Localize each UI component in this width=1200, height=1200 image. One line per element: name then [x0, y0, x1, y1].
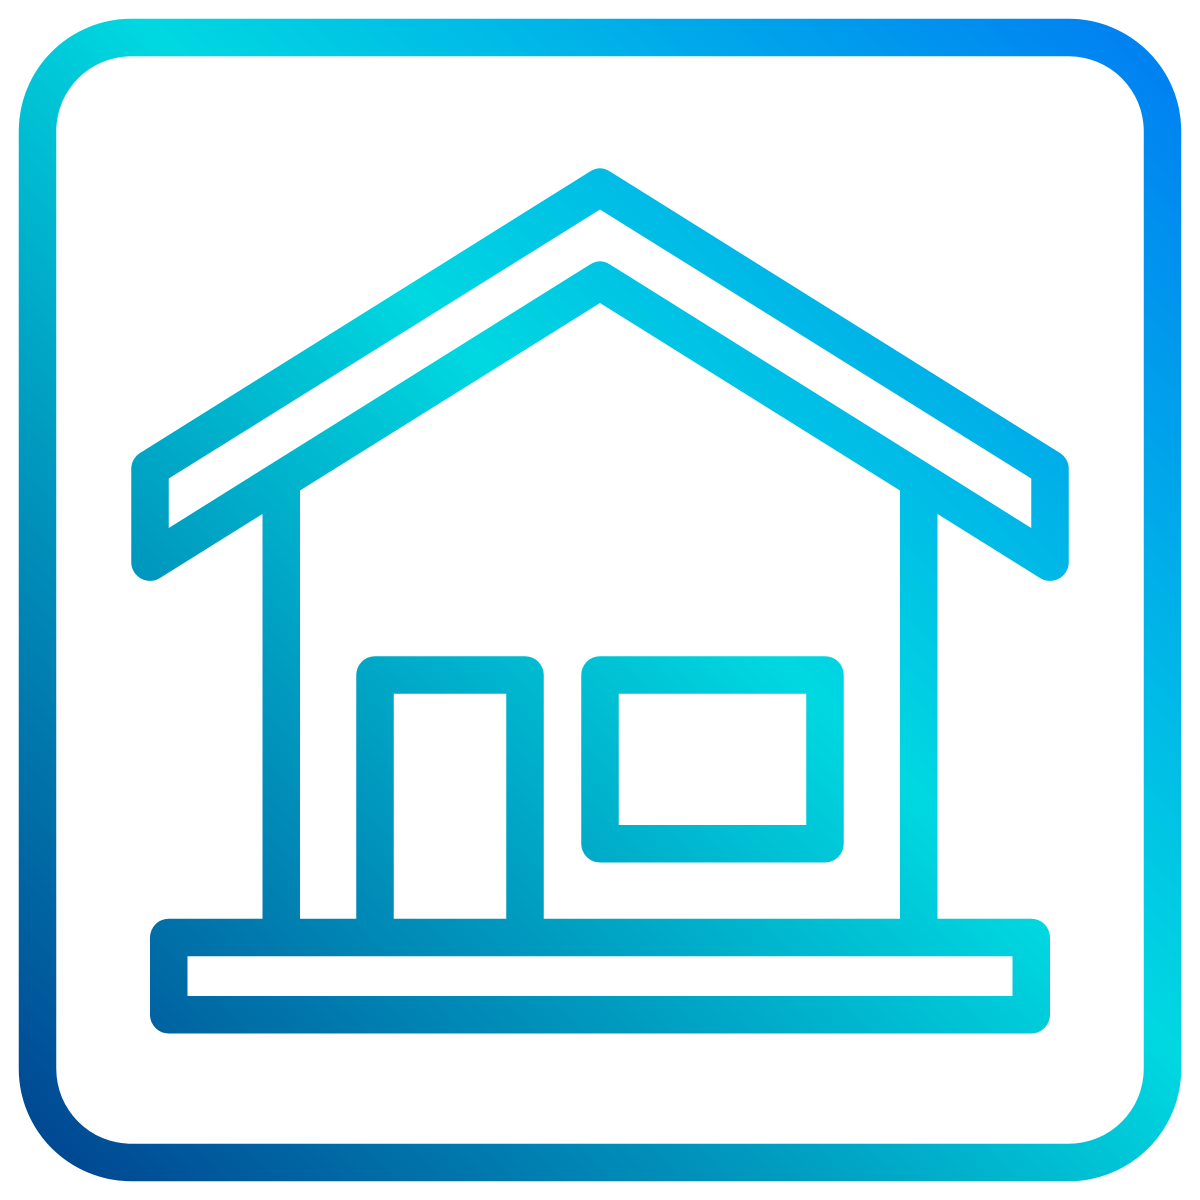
- house outline: roof, walls, door and foundation: [131, 168, 1069, 1034]
- window: [581, 656, 844, 862]
